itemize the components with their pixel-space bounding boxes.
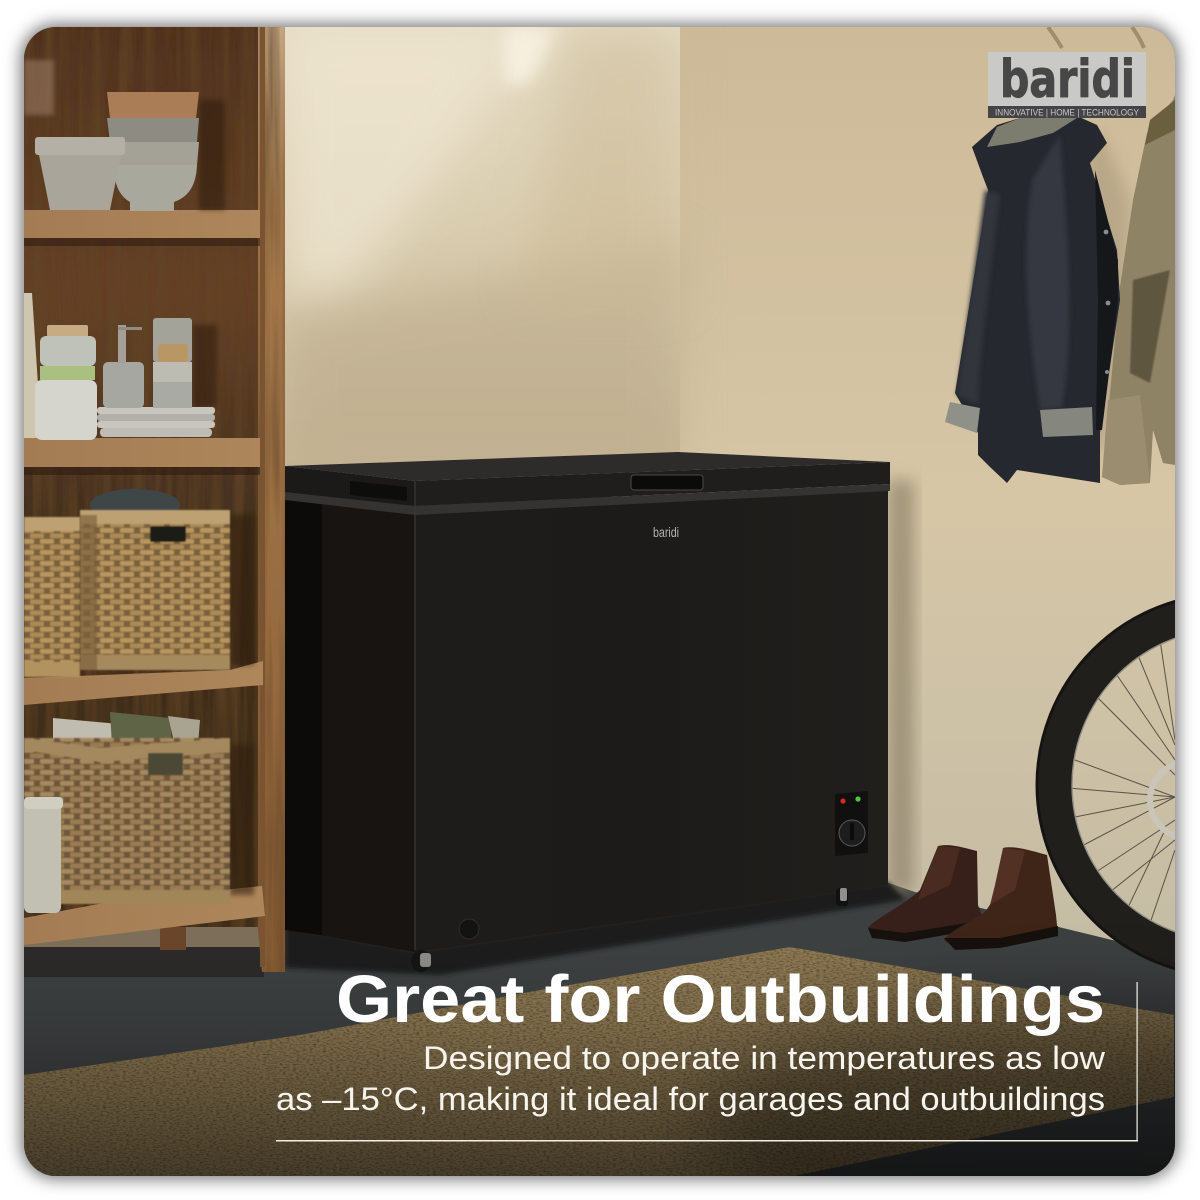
- caption frame: [276, 982, 1138, 1142]
- wicker basket large top: [80, 510, 230, 670]
- white rope bin: [24, 797, 63, 913]
- shelf board 3: [24, 661, 263, 705]
- bottom dark overlay: [24, 950, 1175, 1176]
- jacket elbow patch: [1130, 270, 1170, 383]
- stacked bowls: [107, 92, 199, 211]
- freezer lid top: [285, 452, 890, 481]
- tyre: [1054, 611, 1200, 959]
- coat snaps: [1104, 230, 1110, 374]
- headline: Great for Outbuildings: [336, 962, 1105, 1037]
- stone pot: [35, 137, 125, 210]
- soap dispenser: [103, 325, 144, 408]
- shelf board 2: [24, 438, 260, 467]
- floor: [24, 880, 1174, 1176]
- freezer lid front: [415, 462, 890, 506]
- coat hood lining: [987, 118, 1077, 147]
- dark item behind baskets: [90, 489, 180, 521]
- boots: [868, 845, 1058, 950]
- coat folds: [1027, 135, 1069, 410]
- shelf leg: [160, 923, 186, 950]
- logo tagline: INNOVATIVE | HOME | TECHNOLOGY: [995, 108, 1139, 118]
- back panel reflection: [24, 60, 54, 115]
- olive jacket: [1102, 95, 1175, 485]
- coat shadow: [1090, 139, 1132, 458]
- logo plate: [988, 52, 1146, 106]
- shelf board 1: [24, 210, 260, 238]
- freezer front: [415, 488, 888, 952]
- logo tagline band: [988, 106, 1146, 118]
- logo wordmark: baridi: [1000, 50, 1135, 110]
- right dark overlay: [700, 1000, 1200, 1200]
- left boot: [868, 845, 982, 933]
- brand logo: [988, 50, 1146, 118]
- right wall: [680, 27, 1175, 967]
- description text: [276, 1040, 1106, 1117]
- wooden shelving unit: [24, 27, 285, 977]
- description text: as –15°C, making it ideal for garages and outbuildings: [276, 1081, 1105, 1117]
- shelving back panel: [24, 27, 260, 927]
- right boot: [944, 847, 1058, 948]
- casters: [411, 888, 848, 972]
- wicker basket left: [24, 517, 80, 677]
- control panel: [835, 791, 868, 856]
- jute rug: [24, 947, 1174, 1176]
- freezer side: [285, 474, 415, 952]
- navy raincoat: [945, 116, 1120, 483]
- shelf board 4: [24, 886, 265, 945]
- plate stack: [97, 407, 215, 437]
- papers in basket: [53, 712, 200, 748]
- cream bottle: [24, 293, 38, 438]
- description text: Designed to operate in temperatures as low: [423, 1040, 1106, 1076]
- rim line: [1071, 638, 1175, 932]
- wall sunlight patches: [285, 27, 680, 470]
- freezer lid side: [285, 466, 414, 488]
- under shelf strip: [24, 927, 260, 947]
- coat cuffs: [945, 402, 980, 433]
- bicycle wheel: [1036, 600, 1175, 970]
- shelf shadows: [24, 100, 260, 895]
- hooks: [1048, 27, 1144, 48]
- freezer brand: baridi: [653, 525, 679, 540]
- brake disc: [1147, 761, 1175, 839]
- side handle: [350, 481, 407, 501]
- left wall: [285, 27, 681, 497]
- wheel spokes: [1072, 644, 1175, 920]
- shelving side post: [258, 27, 285, 972]
- wicker basket bottom: [24, 738, 230, 904]
- utensil holder: [153, 318, 192, 408]
- freezer floor shadow: [285, 882, 905, 975]
- white jar: [35, 325, 97, 440]
- freezer seam: [285, 484, 890, 515]
- chest freezer: [285, 452, 890, 972]
- freezer shadow on wall: [888, 480, 914, 892]
- front handle: [631, 475, 703, 490]
